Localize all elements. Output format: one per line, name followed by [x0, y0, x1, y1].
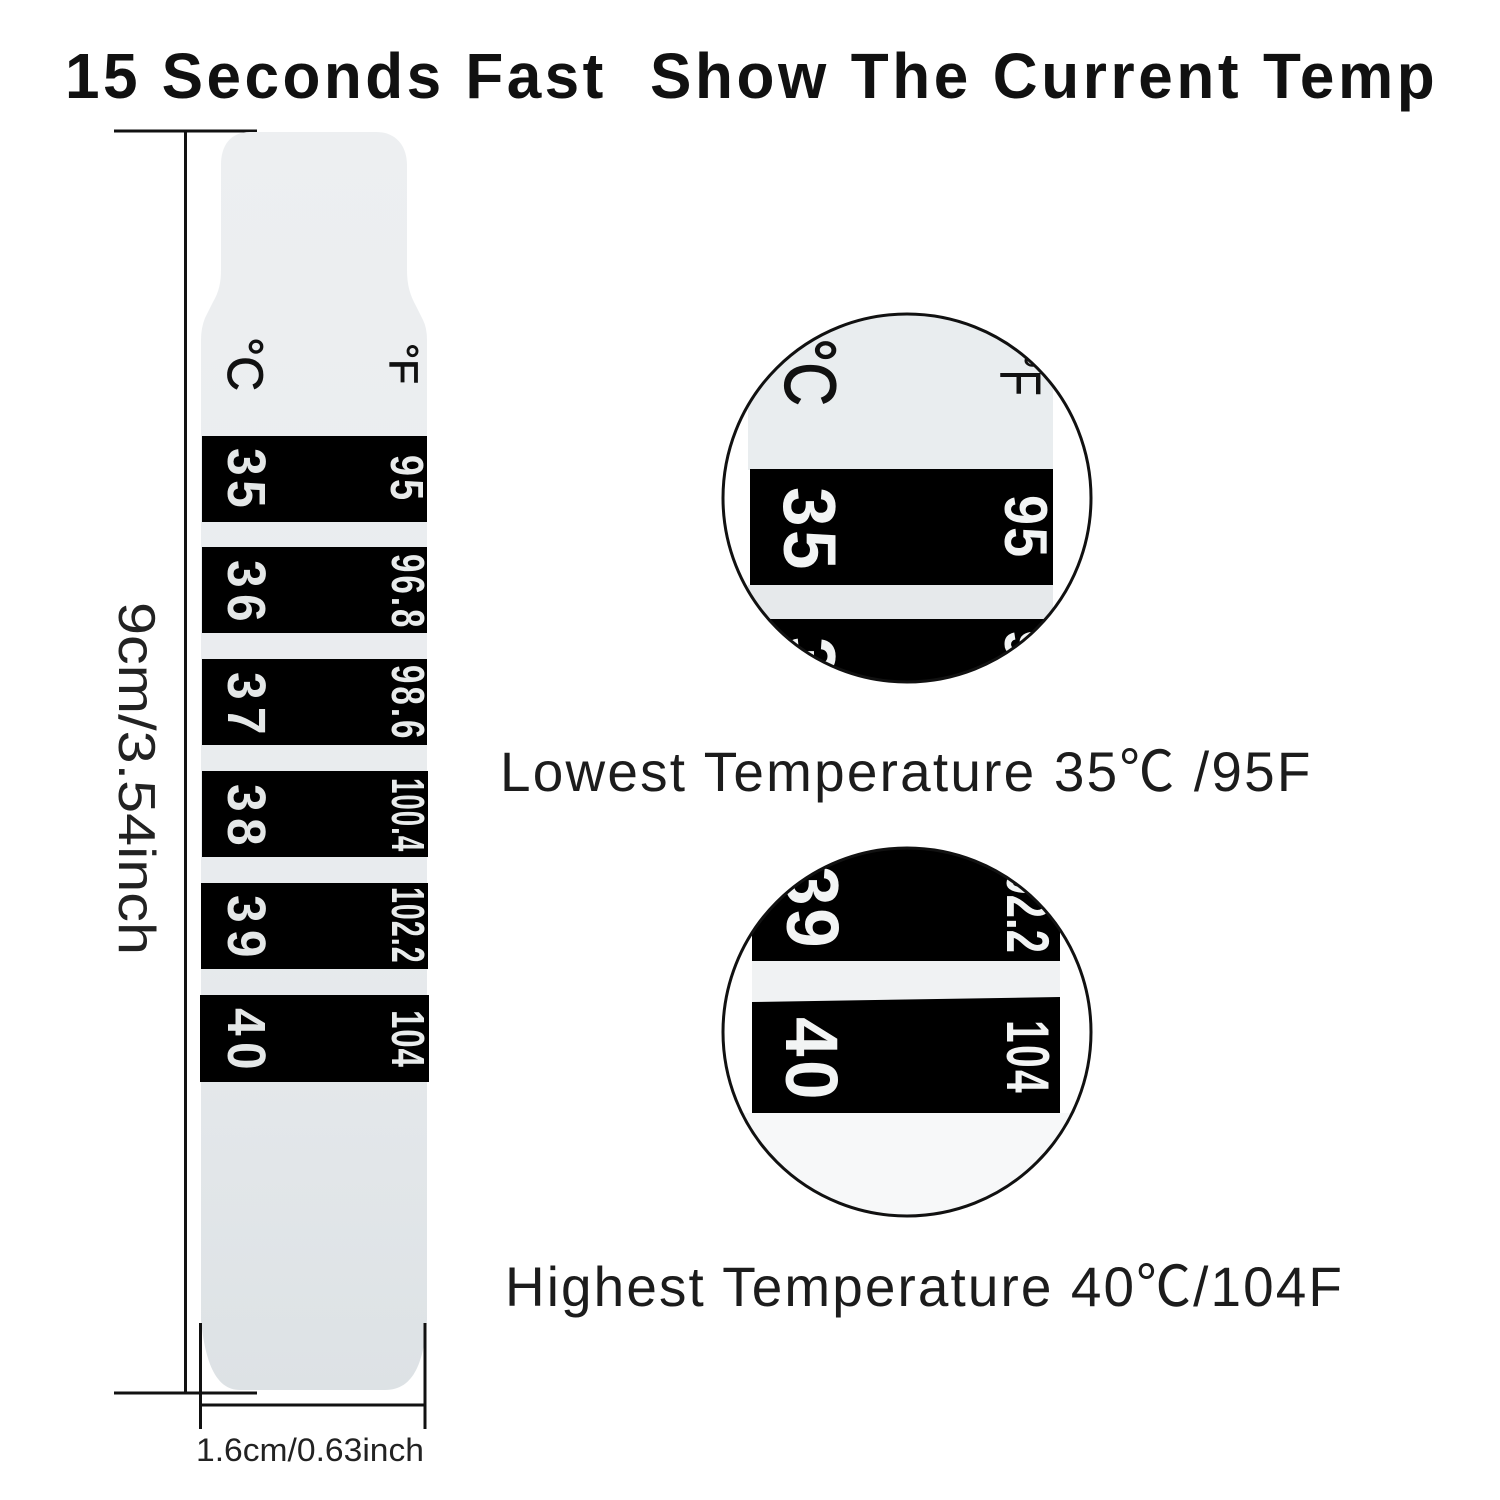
magnifier: highest temperature	[722, 845, 1092, 1221]
scale row 39 / 102.2: 39	[217, 895, 277, 958]
magnifier: lowest temperature: 96.8	[991, 630, 1059, 729]
scale row 36 / 96.8: 36	[217, 560, 277, 622]
height dimension: 9cm/3.54inch	[107, 602, 165, 955]
unit labels	[217, 337, 425, 391]
label: highest temperature: Highest Temperature 40℃/104F	[505, 1255, 1342, 1318]
unit labels: °F	[381, 343, 425, 384]
scale row 38 / 100.4	[202, 771, 432, 857]
strip body	[201, 132, 427, 1390]
scale row 39 / 102.2: 102.2	[381, 887, 433, 963]
scale row 36 / 96.8: 96.8	[382, 554, 432, 627]
scale row 38 / 100.4: 38	[217, 784, 277, 846]
magnifier: highest temperature: 40	[770, 1017, 852, 1100]
scale row 35 / 95: 35	[217, 448, 277, 508]
scale row 40 / 104	[200, 995, 432, 1082]
scale row 37 / 98.6	[202, 659, 432, 745]
height dimension	[107, 131, 257, 1393]
scale row 35 / 95: 95	[381, 455, 433, 500]
scale row 37 / 98.6: 98.6	[382, 665, 432, 738]
magnifier: lowest temperature: 35	[768, 487, 850, 570]
title: Show The Current Temp	[650, 41, 1435, 112]
title	[65, 41, 1435, 112]
title: 15 Seconds Fast	[65, 41, 603, 112]
width dimension: 1.6cm/0.63inch	[196, 1432, 424, 1468]
scale row 40 / 104: 40	[217, 1008, 277, 1070]
width dimension	[196, 1323, 425, 1468]
scale row 37 / 98.6: 37	[217, 672, 277, 735]
magnifier: highest temperature: 39	[771, 866, 853, 948]
scale row 35 / 95	[202, 436, 433, 522]
magnifier: lowest temperature: °C	[769, 338, 849, 406]
label: lowest temperature: Lowest Temperature 35℃ /95F	[500, 740, 1310, 803]
magnifier: lowest temperature: °F	[987, 352, 1052, 396]
magnifier: highest temperature: 104	[994, 1020, 1061, 1093]
scale row 38 / 100.4: 100.4	[381, 778, 432, 851]
magnifier: lowest temperature: 36	[768, 637, 850, 720]
magnifier: lowest temperature: 95	[991, 495, 1059, 557]
scale row 40 / 104: 104	[382, 1010, 432, 1067]
scale row 36 / 96.8	[202, 547, 432, 633]
unit labels: °C	[217, 337, 273, 391]
magnifier: highest temperature: 102.2	[994, 848, 1061, 953]
scale row 39 / 102.2	[201, 883, 433, 969]
thermometer strip	[200, 132, 433, 1390]
magnifier: lowest temperature	[722, 312, 1092, 684]
